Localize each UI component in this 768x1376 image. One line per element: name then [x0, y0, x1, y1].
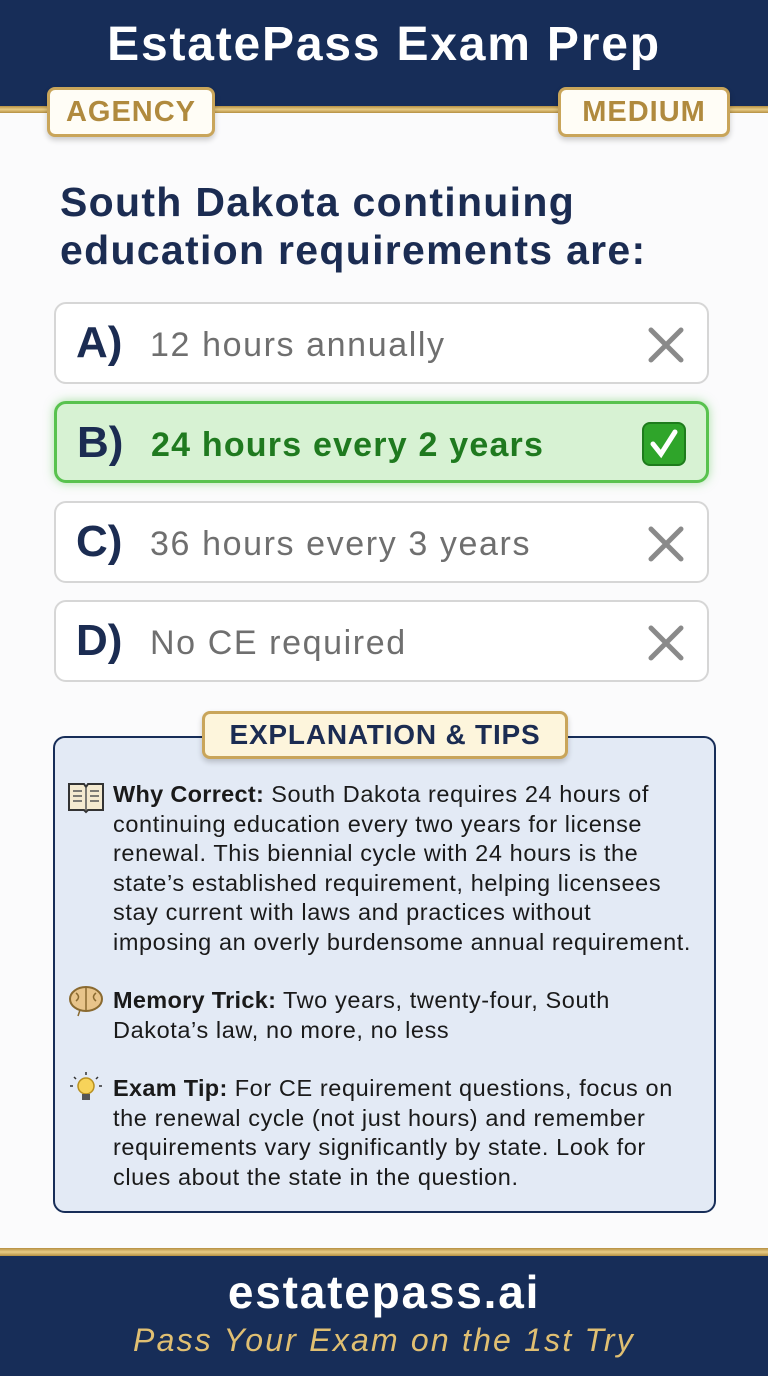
option A: A): [76, 318, 122, 367]
badge: agency: [47, 87, 215, 137]
option A: [54, 302, 709, 384]
footer band: [0, 1256, 768, 1376]
footer tagline: Pass Your Exam on the 1st Try: [133, 1322, 635, 1358]
option D: D): [76, 616, 122, 665]
text: memory trick: Memory Trick: Two years, twenty-four, South: [113, 987, 610, 1013]
option C: C): [76, 517, 122, 566]
badge: agency: AGENCY: [66, 96, 196, 128]
text: memory trick: Dakota’s law, no more, no less: [113, 1016, 449, 1042]
text: why correct: renewal. This biennial cycle with 24 hours is the: [113, 840, 638, 866]
text: exam tip: Exam Tip: For CE requirement questions, focus on: [113, 1075, 673, 1101]
text: why correct: state’s established requirement, helping licensees: [113, 870, 661, 896]
option B (correct): [54, 401, 709, 483]
text: exam tip: requirements vary significantly by state. Look for: [113, 1134, 646, 1160]
footer url: estatepass.ai: [228, 1266, 540, 1318]
option D: [54, 600, 709, 682]
option B (correct): B): [77, 418, 123, 467]
panel: explanation: [53, 736, 716, 1213]
footer gold rule: [0, 1248, 768, 1256]
badge: medium: [558, 87, 730, 137]
text: exam tip: clues about the state in the question.: [113, 1164, 519, 1190]
text: exam tip: the renewal cycle (not just hours) and remember: [113, 1104, 645, 1130]
text: why correct: continuing education every two years for license: [113, 810, 642, 836]
text: exam tip: [113, 1075, 673, 1190]
title: EstatePass Exam Prep: [107, 18, 661, 71]
explanation badge: EXPLANATION & TIPS: [229, 719, 540, 750]
question: [60, 179, 646, 273]
badge: medium: MEDIUM: [582, 96, 706, 128]
explanation badge: [202, 711, 568, 759]
option C: [54, 501, 709, 583]
text: why correct: Why Correct: South Dakota requires 24 hours of: [113, 781, 649, 807]
icon: book: [68, 783, 104, 814]
text: memory trick: [113, 987, 610, 1042]
option B (correct): 24 hours every 2 years: [151, 426, 544, 464]
option D: No CE required: [150, 624, 407, 662]
question: education requirements are:: [60, 227, 646, 273]
text: why correct: [113, 781, 691, 955]
header band: [0, 0, 768, 108]
icon: brain: [69, 986, 103, 1016]
gold rule: [0, 106, 768, 113]
text: why correct: stay current with laws and practices without: [113, 899, 591, 925]
icon: lightbulb: [70, 1072, 102, 1100]
option A: 12 hours annually: [150, 326, 446, 364]
option C: 36 hours every 3 years: [150, 525, 531, 563]
text: why correct: imposing an overly burdensome annual requirement.: [113, 928, 691, 954]
question: South Dakota continuing: [60, 179, 575, 225]
